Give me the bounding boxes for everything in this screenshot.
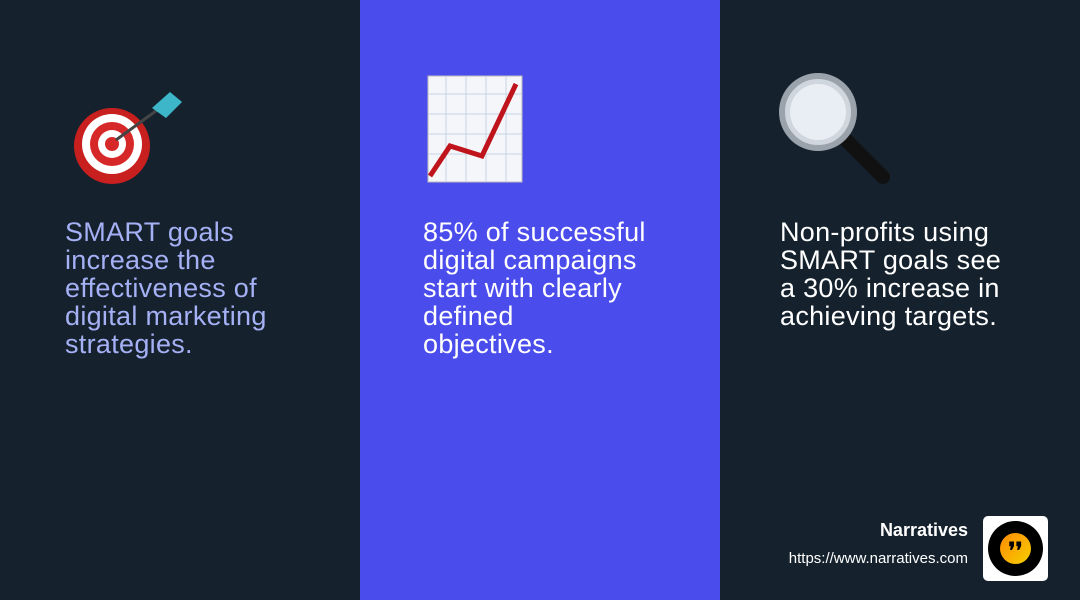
text: middle: digital campaigns xyxy=(423,245,637,275)
text: left: effectiveness of xyxy=(65,273,257,303)
panel: middle xyxy=(360,0,720,600)
panel: left xyxy=(0,0,360,600)
text: right: achieving targets. xyxy=(780,301,997,331)
icon: target with dart xyxy=(74,92,182,184)
brand url: https://www.narratives.com xyxy=(789,550,968,567)
brand name: Narratives xyxy=(880,520,968,540)
text: middle: objectives. xyxy=(423,329,554,359)
text: middle: defined xyxy=(423,301,514,331)
text: middle: start with clearly xyxy=(423,273,622,303)
text: right: SMART goals see xyxy=(780,245,1001,275)
text: right: a 30% increase in xyxy=(780,273,1000,303)
text: left xyxy=(65,217,267,359)
text: middle xyxy=(423,217,646,359)
text: right: Non-profits using xyxy=(780,217,989,247)
text: left: digital marketing xyxy=(65,301,267,331)
logo: ❜❜ xyxy=(1008,538,1023,563)
icon: magnifier xyxy=(779,73,890,184)
text: left: SMART goals xyxy=(65,217,234,247)
panel: right xyxy=(720,0,1080,600)
text: left: strategies. xyxy=(65,329,193,359)
text: left: increase the xyxy=(65,245,216,275)
logo xyxy=(983,516,1048,581)
text: middle: 85% of successful xyxy=(423,217,646,247)
icon: chart xyxy=(428,76,522,182)
text: right xyxy=(780,217,1001,331)
